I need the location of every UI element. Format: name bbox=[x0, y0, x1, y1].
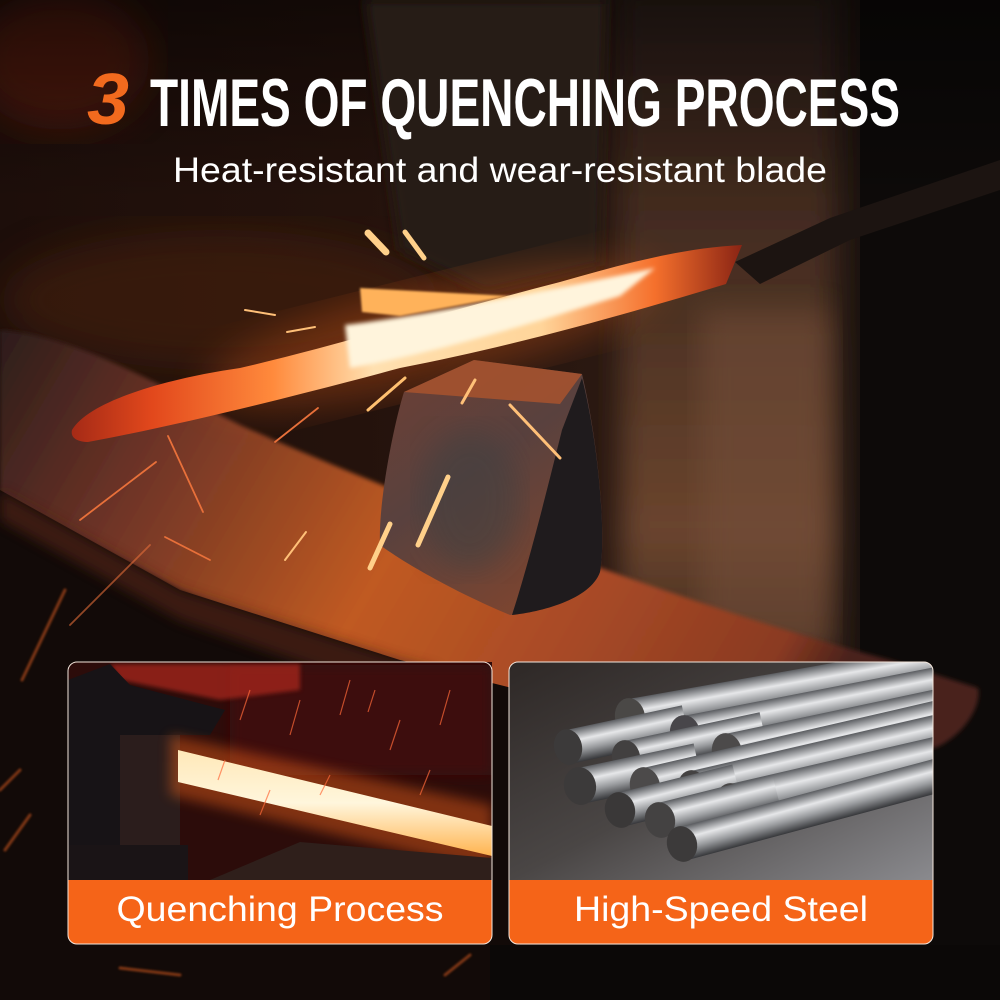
anvil bbox=[0, 330, 1000, 1000]
label text: Quenching Process bbox=[116, 889, 444, 929]
glowing blade and tang bbox=[72, 160, 1000, 442]
subtitle: Heat-resistant and wear-resistant blade bbox=[173, 150, 827, 190]
panel: quenching process bbox=[68, 662, 492, 944]
label bar bbox=[68, 880, 492, 944]
panel: high-speed steel bbox=[508, 662, 934, 944]
hammer silhouette bbox=[365, 0, 606, 292]
title: 3 bbox=[87, 60, 129, 140]
label bar bbox=[509, 880, 933, 944]
label text: High-Speed Steel bbox=[574, 889, 868, 929]
photo: glowing steel bar in press bbox=[68, 662, 492, 880]
steel wedge on anvil bbox=[380, 360, 602, 615]
sparks bbox=[0, 232, 560, 975]
photo: steel rods bbox=[510, 662, 932, 880]
